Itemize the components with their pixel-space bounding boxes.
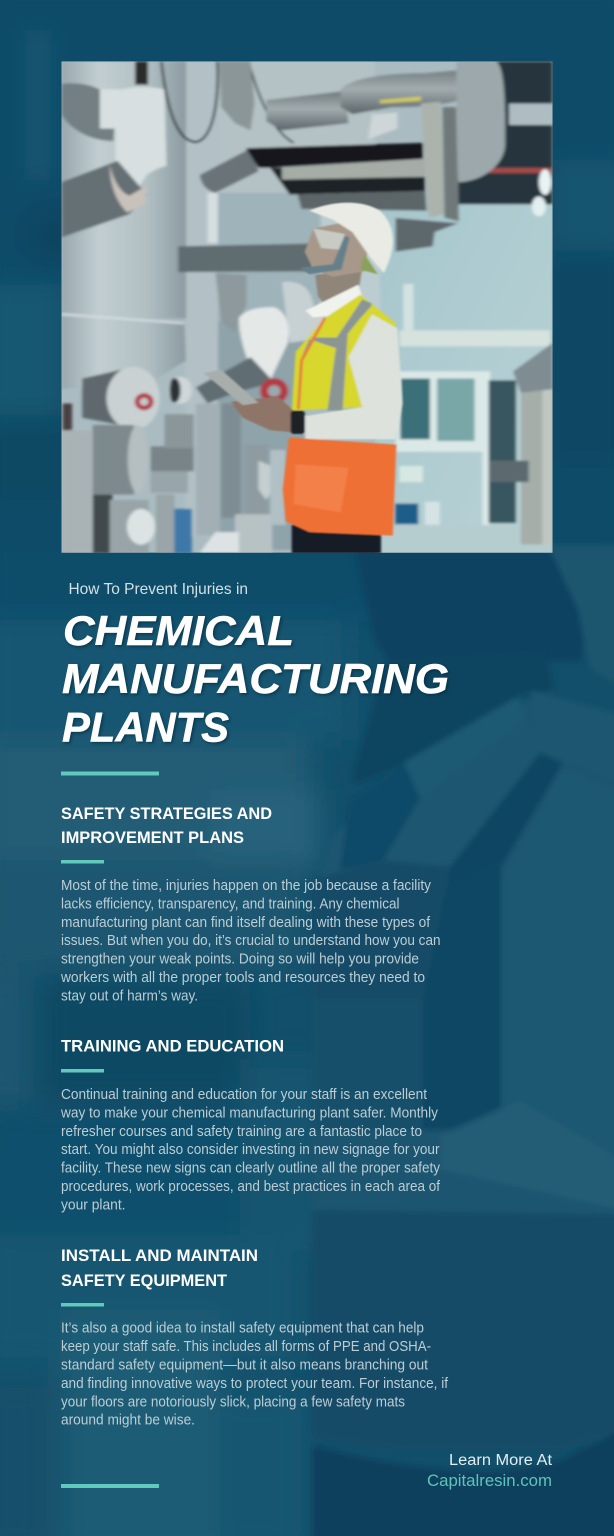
subtitle: How To Prevent Injuries in [68, 581, 248, 598]
section 3 heading: SAFETY EQUIPMENT [61, 1271, 228, 1290]
back wall [376, 200, 553, 554]
section 1 heading [61, 804, 272, 847]
section 1 body: lacks efficiency, transparency, and training. Any chemical [61, 896, 400, 912]
collar [403, 697, 527, 798]
right body [312, 700, 614, 1440]
section 1 body: Most of the time, injuries happen on the job because a facility [61, 878, 432, 894]
section 3 body [61, 1321, 449, 1429]
section 2 rule [61, 1069, 104, 1072]
worker: hand and watch [231, 396, 302, 432]
worker: goggles [313, 229, 345, 250]
helmet [353, 545, 590, 680]
section 1 body: stay out of harm’s way. [61, 988, 198, 1004]
section 1 body: workers with all the proper tools and resources they need to [60, 970, 425, 986]
section 2 body: procedures, work processes, and best practices in each area of [61, 1179, 441, 1195]
section 3 body: standard safety equipment—but it also means branching out [61, 1358, 428, 1374]
section 1 body: manufacturing plant can find itself dealing with these types of [61, 915, 431, 931]
section 1 heading: SAFETY STRATEGIES AND [61, 804, 272, 823]
worker: trousers [292, 525, 381, 554]
section 1 rule [61, 860, 104, 864]
section 2 body: start. You might also consider investing in new signage for your [61, 1142, 440, 1158]
vest strap [423, 753, 563, 1060]
section 3 heading [61, 1246, 258, 1290]
worker: hi-vis vest yellow [292, 295, 400, 411]
worker: neck and face [315, 268, 362, 309]
lower left valve [82, 370, 121, 425]
worker: hard hat [309, 203, 393, 273]
section 3 rule [61, 1303, 104, 1306]
horizontal pipe at head height [178, 244, 313, 272]
hero photo: engineer with tablet beside plant piping [61, 61, 553, 554]
worker: orange lower vest [283, 437, 396, 536]
black duct platform [246, 143, 423, 168]
tablet [204, 370, 258, 405]
wall window unit [399, 330, 550, 346]
call to action [427, 1452, 553, 1490]
corrugated elbow & white trap [215, 273, 247, 332]
section 2 body: Continual training and education for your staff is an excellent [61, 1087, 427, 1103]
section 2 body: way to make your chemical manufacturing plant safer. Monthly [60, 1105, 439, 1121]
call to action: Learn More At [449, 1452, 553, 1469]
section 3 body: around might be wise. [61, 1413, 195, 1429]
right machine [520, 390, 544, 546]
section 2 body: refresher courses and safety training are a fantastic place to [61, 1124, 422, 1140]
diagonal pipe left [61, 161, 147, 237]
large tank [61, 61, 186, 319]
worker: shirt and collar [305, 285, 362, 318]
upper pipework [219, 61, 255, 130]
section 3 body: keep your staff safe. This includes all forms of PPE and OSHA- [61, 1339, 431, 1355]
title: PLANTS [62, 704, 229, 750]
title [62, 607, 449, 750]
section 2 body [60, 1087, 441, 1213]
section 1 body: issues. But when you do, it’s crucial to understand how you can [61, 933, 440, 949]
section 1 heading: IMPROVEMENT PLANS [61, 828, 244, 847]
section 3 body: It’s also a good idea to install safety equipment that can help [61, 1321, 424, 1337]
cables [161, 61, 218, 142]
section 3 body: and finding innovative ways to protect your team. For instance, if [61, 1376, 449, 1392]
section 3 heading: INSTALL AND MAINTAIN [61, 1246, 258, 1265]
title: CHEMICAL [63, 607, 294, 654]
title: MANUFACTURING [62, 655, 449, 702]
footer rule [61, 1484, 159, 1488]
title rule [61, 772, 159, 776]
neck and chin [530, 690, 614, 790]
worker: arm [305, 314, 403, 439]
section 2 heading: TRAINING AND EDUCATION [61, 1037, 284, 1056]
call to action: Capitalresin.com [427, 1472, 552, 1490]
section 3 body: your floors are notoriously slick, placing a few safety mats [61, 1394, 405, 1410]
section 2 body: your plant. [61, 1197, 126, 1213]
section 2 body: facility. These new signs can clearly outline all the proper safety [61, 1161, 441, 1177]
lower pipes [61, 430, 93, 554]
section 1 body [60, 878, 440, 1004]
column pipe centre [186, 61, 218, 536]
section 1 body: strengthen your weak points. Doing so will help you provide [61, 952, 419, 968]
arm [501, 770, 614, 1215]
top left elbow pipe [61, 83, 116, 141]
